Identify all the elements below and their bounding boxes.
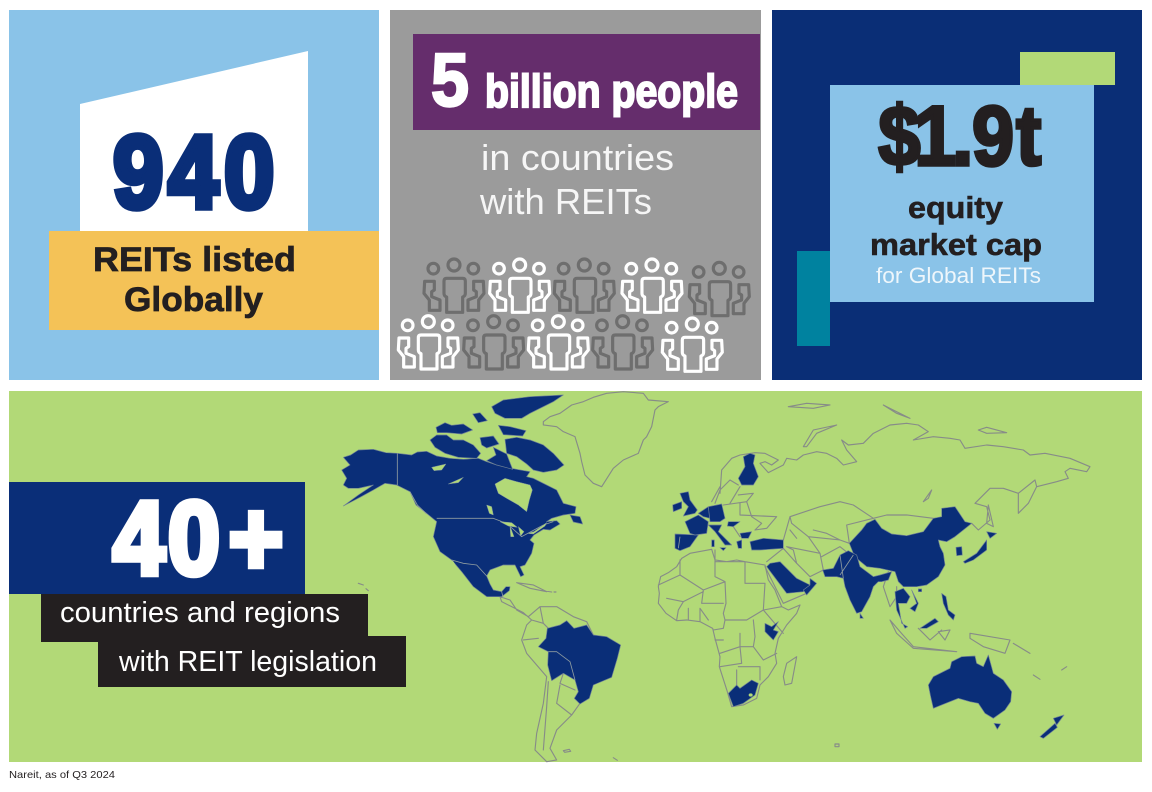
text: countries and regions with REIT legislation: with REIT legislation xyxy=(118,646,377,678)
label: REITs listed Globally: REITs listed xyxy=(93,241,296,279)
icon: groups of people xyxy=(398,259,749,371)
panel: $1.9t equity market cap xyxy=(772,10,1142,380)
Africa outline with borders xyxy=(658,549,800,707)
Greenland xyxy=(543,392,668,487)
yellow label bar xyxy=(49,231,379,330)
Middle East REIT countries xyxy=(750,538,817,595)
Brazil and Bolivia xyxy=(538,621,621,704)
Kenya and South Africa xyxy=(728,622,778,707)
Hudson Bay xyxy=(495,478,532,512)
source note: Nareit, as of Q3 2024 xyxy=(9,769,115,781)
green accent rectangle xyxy=(1020,52,1115,85)
text: in countries with REITs xyxy=(479,137,674,222)
stat: 940: 940 xyxy=(113,114,274,230)
North America REIT countries xyxy=(342,395,583,598)
navy stat banner xyxy=(9,482,305,594)
purple heading bar xyxy=(413,34,760,130)
stat: 40+: 40+ xyxy=(113,479,283,596)
text: for Global REITs: for Global REITs xyxy=(876,263,1041,288)
Eurasia outline with borders xyxy=(712,403,1090,747)
European REIT countries xyxy=(673,453,758,551)
black label: with REIT legislation xyxy=(98,636,406,687)
stat: $1.9t: $1.9t xyxy=(878,89,1041,183)
panel: 5 billion people xyxy=(390,10,761,380)
Caribbean and Hawaii xyxy=(358,583,556,592)
Australia and New Zealand xyxy=(928,655,1064,738)
South America outline xyxy=(500,597,617,762)
heading: billion people: billion people xyxy=(485,65,738,117)
teal accent rectangle xyxy=(797,251,830,346)
text: in countries with REITs: with REITs xyxy=(479,181,652,222)
label: REITs listed Globally xyxy=(93,241,296,319)
label: equity market cap: market cap xyxy=(870,227,1042,262)
text: countries and regions with REIT legislation: countries and regions xyxy=(60,597,340,629)
stat: 5: 5 xyxy=(431,38,469,122)
panel: 940 REITs listed xyxy=(9,10,379,380)
panel: world map xyxy=(9,391,1142,762)
text: countries and regions with REIT legislation xyxy=(60,597,377,678)
map: Europe, Asia, Africa, Oceania xyxy=(658,403,1090,747)
label: equity market cap xyxy=(870,190,1042,262)
map: Americas xyxy=(342,392,668,762)
Gulf of California xyxy=(453,562,465,582)
black label: countries and regions xyxy=(41,594,368,642)
white building shape xyxy=(80,51,308,232)
label: REITs listed Globally: Globally xyxy=(124,281,263,319)
text: in countries with REITs: in countries xyxy=(481,137,674,178)
light blue card xyxy=(830,85,1094,302)
Asian REIT countries xyxy=(823,507,997,628)
label: equity market cap: equity xyxy=(908,190,1004,225)
